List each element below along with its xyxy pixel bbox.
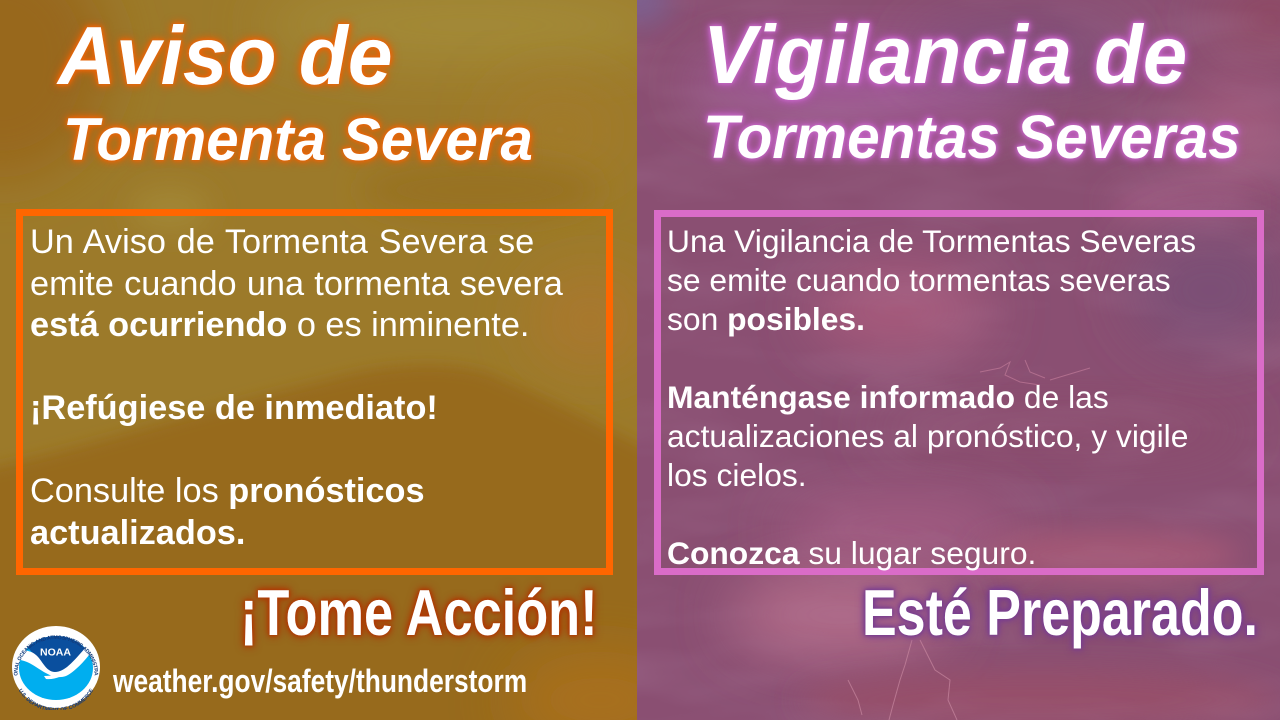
text: warning definition xyxy=(30,223,563,344)
text: warning definition: Un Aviso de Tormenta Severa se xyxy=(30,223,534,261)
title: Vigilancia de: Vigilancia de xyxy=(703,8,1187,101)
text: check forecasts xyxy=(30,472,425,552)
text: stay informed: actualizaciones al pronóstico, y vigile xyxy=(667,418,1188,454)
panel: severe thunderstorm watch xyxy=(654,210,1264,575)
call to action: take action: ¡Tome Acción! xyxy=(240,576,598,649)
text: check forecasts: actualizados. xyxy=(30,514,245,552)
text: know your safe place: Conozca su lugar seguro. xyxy=(667,535,1036,571)
call to action: be prepared: Esté Preparado. xyxy=(862,576,1258,649)
icon: NOAA logo: NOAA xyxy=(40,646,71,658)
title: Aviso de: Aviso de xyxy=(58,9,393,102)
subtitle: Tormenta Severa: Tormenta Severa xyxy=(63,105,533,173)
text: stay informed: los cielos. xyxy=(667,457,807,493)
text: watch definition xyxy=(667,223,1196,337)
text: watch definition: se emite cuando tormentas severas xyxy=(667,262,1171,298)
text: watch definition: son posibles. xyxy=(667,301,865,337)
subtitle: Tormentas Severas: Tormentas Severas xyxy=(703,103,1241,171)
text: watch definition: Una Vigilancia de Tormentas Severas xyxy=(667,223,1196,259)
text: stay informed xyxy=(667,379,1188,493)
text: check forecasts: Consulte los pronósticos xyxy=(30,472,425,510)
link: weather.gov safety URL: weather.gov/safety/thunderstorm xyxy=(113,663,527,699)
panel: severe thunderstorm warning xyxy=(16,209,613,575)
text: take shelter: ¡Refúgiese de inmediato! xyxy=(30,389,438,427)
text: warning definition: emite cuando una tormenta severa xyxy=(30,264,563,302)
text: warning definition: está ocurriendo o es inminente. xyxy=(30,306,529,344)
icon: NOAA logo xyxy=(12,626,100,710)
text: stay informed: Manténgase informado de las xyxy=(667,379,1109,415)
